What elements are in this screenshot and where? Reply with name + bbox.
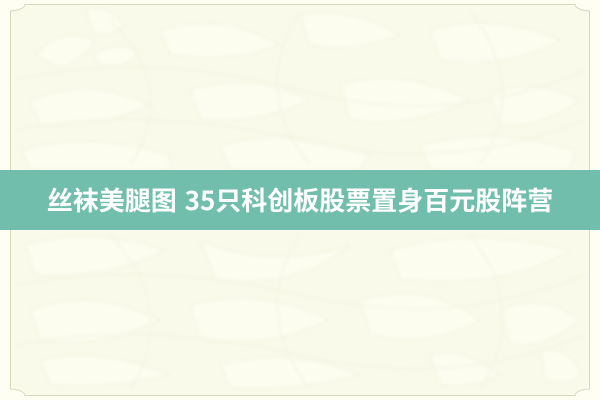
title: 丝袜美腿图 35只科创板股票置身百元股阵营: [47, 181, 553, 218]
title band: [0, 170, 600, 230]
